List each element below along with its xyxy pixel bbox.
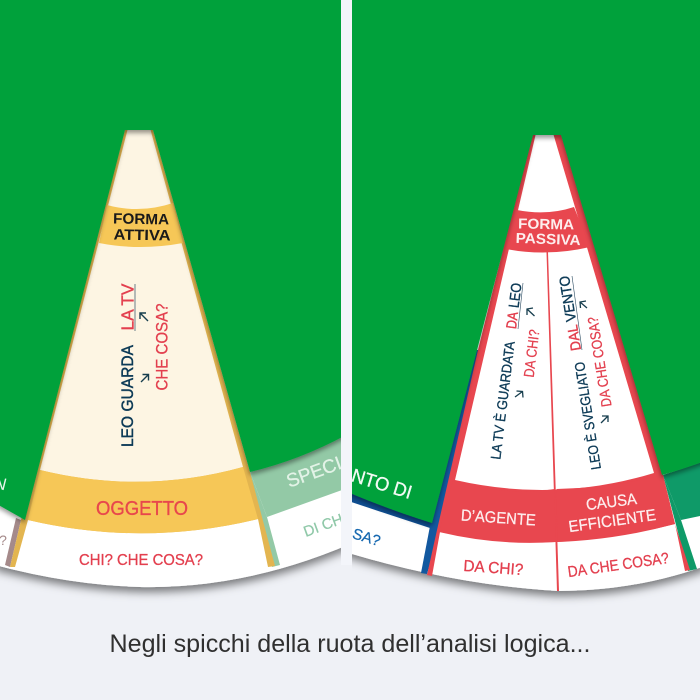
panel gap [341, 0, 352, 565]
label: causa efficiente: CAUSA [585, 491, 638, 514]
white wedge [455, 133, 654, 490]
label: chi che cosa: CHI? CHE COSA? [79, 552, 203, 569]
caption: Negli spicchi della ruota dell’analisi logica... [110, 630, 590, 658]
label: d'agente: D’AGENTE [460, 507, 536, 530]
cream wedge [40, 128, 243, 482]
panel: forma passiva [345, 0, 700, 591]
oggetto band [28, 467, 258, 533]
wheel disc [345, 300, 700, 591]
centre divider [546, 252, 559, 591]
label: da che cosa: DA CHE COSA? [567, 550, 670, 581]
icon: arrow down [601, 416, 608, 423]
underline da leo [518, 283, 523, 329]
label: di chi: DI CH [301, 511, 346, 541]
teal strip [663, 475, 697, 571]
label: forma attiva: ATTIVA [113, 227, 171, 244]
band: causa efficiente [556, 475, 675, 542]
example: leo guarda: LEO GUARDA [118, 344, 137, 447]
label: forma attiva [114, 213, 170, 240]
underline la tv [134, 284, 136, 331]
question: che cosa: CHE COSA? [152, 304, 172, 390]
panel: forma attiva [0, 0, 350, 587]
label: causa efficiente: EFFICIENTE [568, 507, 657, 536]
yellow sector base [10, 130, 275, 567]
example: la tv: LA TV [118, 283, 138, 330]
example: dal: DAL [565, 324, 585, 352]
label: sa: SA? [350, 525, 382, 550]
example: da: DA [504, 311, 522, 330]
icon: arrow up [580, 301, 587, 308]
label: causa efficiente [568, 493, 656, 532]
icon: arrow up [527, 308, 534, 316]
neighbour sector: specificazione band [250, 435, 345, 517]
question: da che cosa: DA CHE COSA? [586, 315, 616, 408]
example: la tv e guardata: LA TV È GUARDATA [487, 340, 518, 460]
red sector base [427, 133, 690, 576]
example: leo e svegliato: LEO È SVEGLIATO [571, 361, 604, 471]
icon: arrow down [141, 374, 148, 382]
blue neighbour band [352, 494, 431, 528]
blue strip [421, 350, 481, 574]
example: leo: LEO [507, 282, 525, 309]
question: da chi: DA CHI? [522, 329, 543, 378]
label: forma passiva: PASSIVA [515, 231, 581, 249]
underline dal vento [572, 276, 582, 350]
label: forma attiva: FORMA [113, 211, 169, 228]
wheel disc [0, 490, 341, 598]
teal band [663, 461, 700, 520]
label: speci: SPECI [284, 453, 345, 492]
icon: arrow down [515, 391, 523, 398]
mauve neighbour strip [5, 518, 21, 567]
band: forma passiva [506, 207, 590, 253]
example: vento: VENTO [557, 275, 580, 323]
label: complemento di: NTO DI [349, 466, 414, 504]
icon: arrow up [140, 313, 148, 321]
band: d'agente [440, 489, 555, 543]
label: forma passiva [515, 217, 581, 249]
green cover [0, 0, 346, 520]
label: oggetto: OGGETTO [96, 498, 188, 520]
label: da chi: DA CHI? [463, 558, 524, 579]
pale green strip [250, 472, 280, 567]
green cover [345, 0, 700, 523]
forma attiva band [99, 203, 183, 247]
label: forma passiva: FORMA [518, 217, 575, 233]
